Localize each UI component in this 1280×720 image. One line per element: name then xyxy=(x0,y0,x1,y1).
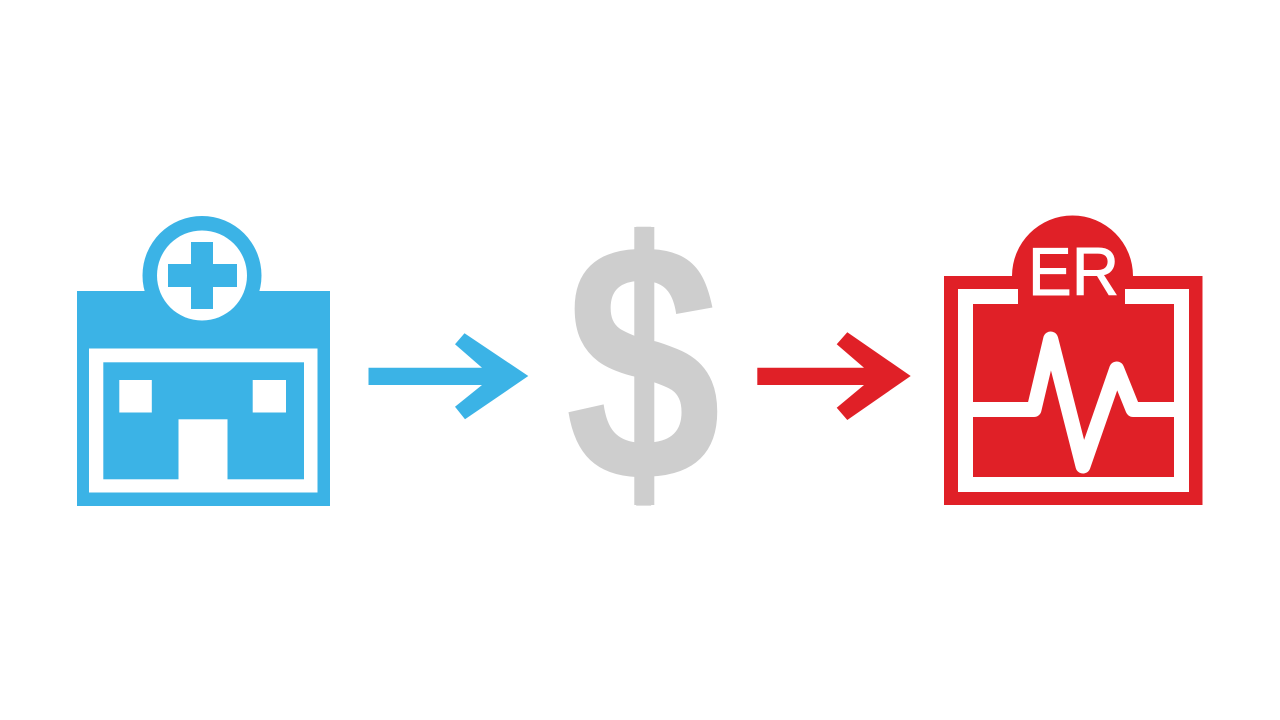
icon: dollar sign: $ xyxy=(565,172,721,553)
icon: emergency room xyxy=(944,215,1202,505)
arrow: hospital to dollar xyxy=(368,333,528,419)
label: ER: ER xyxy=(1028,234,1119,310)
arrow: dollar to ER xyxy=(757,332,911,420)
icon: hospital xyxy=(77,216,330,506)
